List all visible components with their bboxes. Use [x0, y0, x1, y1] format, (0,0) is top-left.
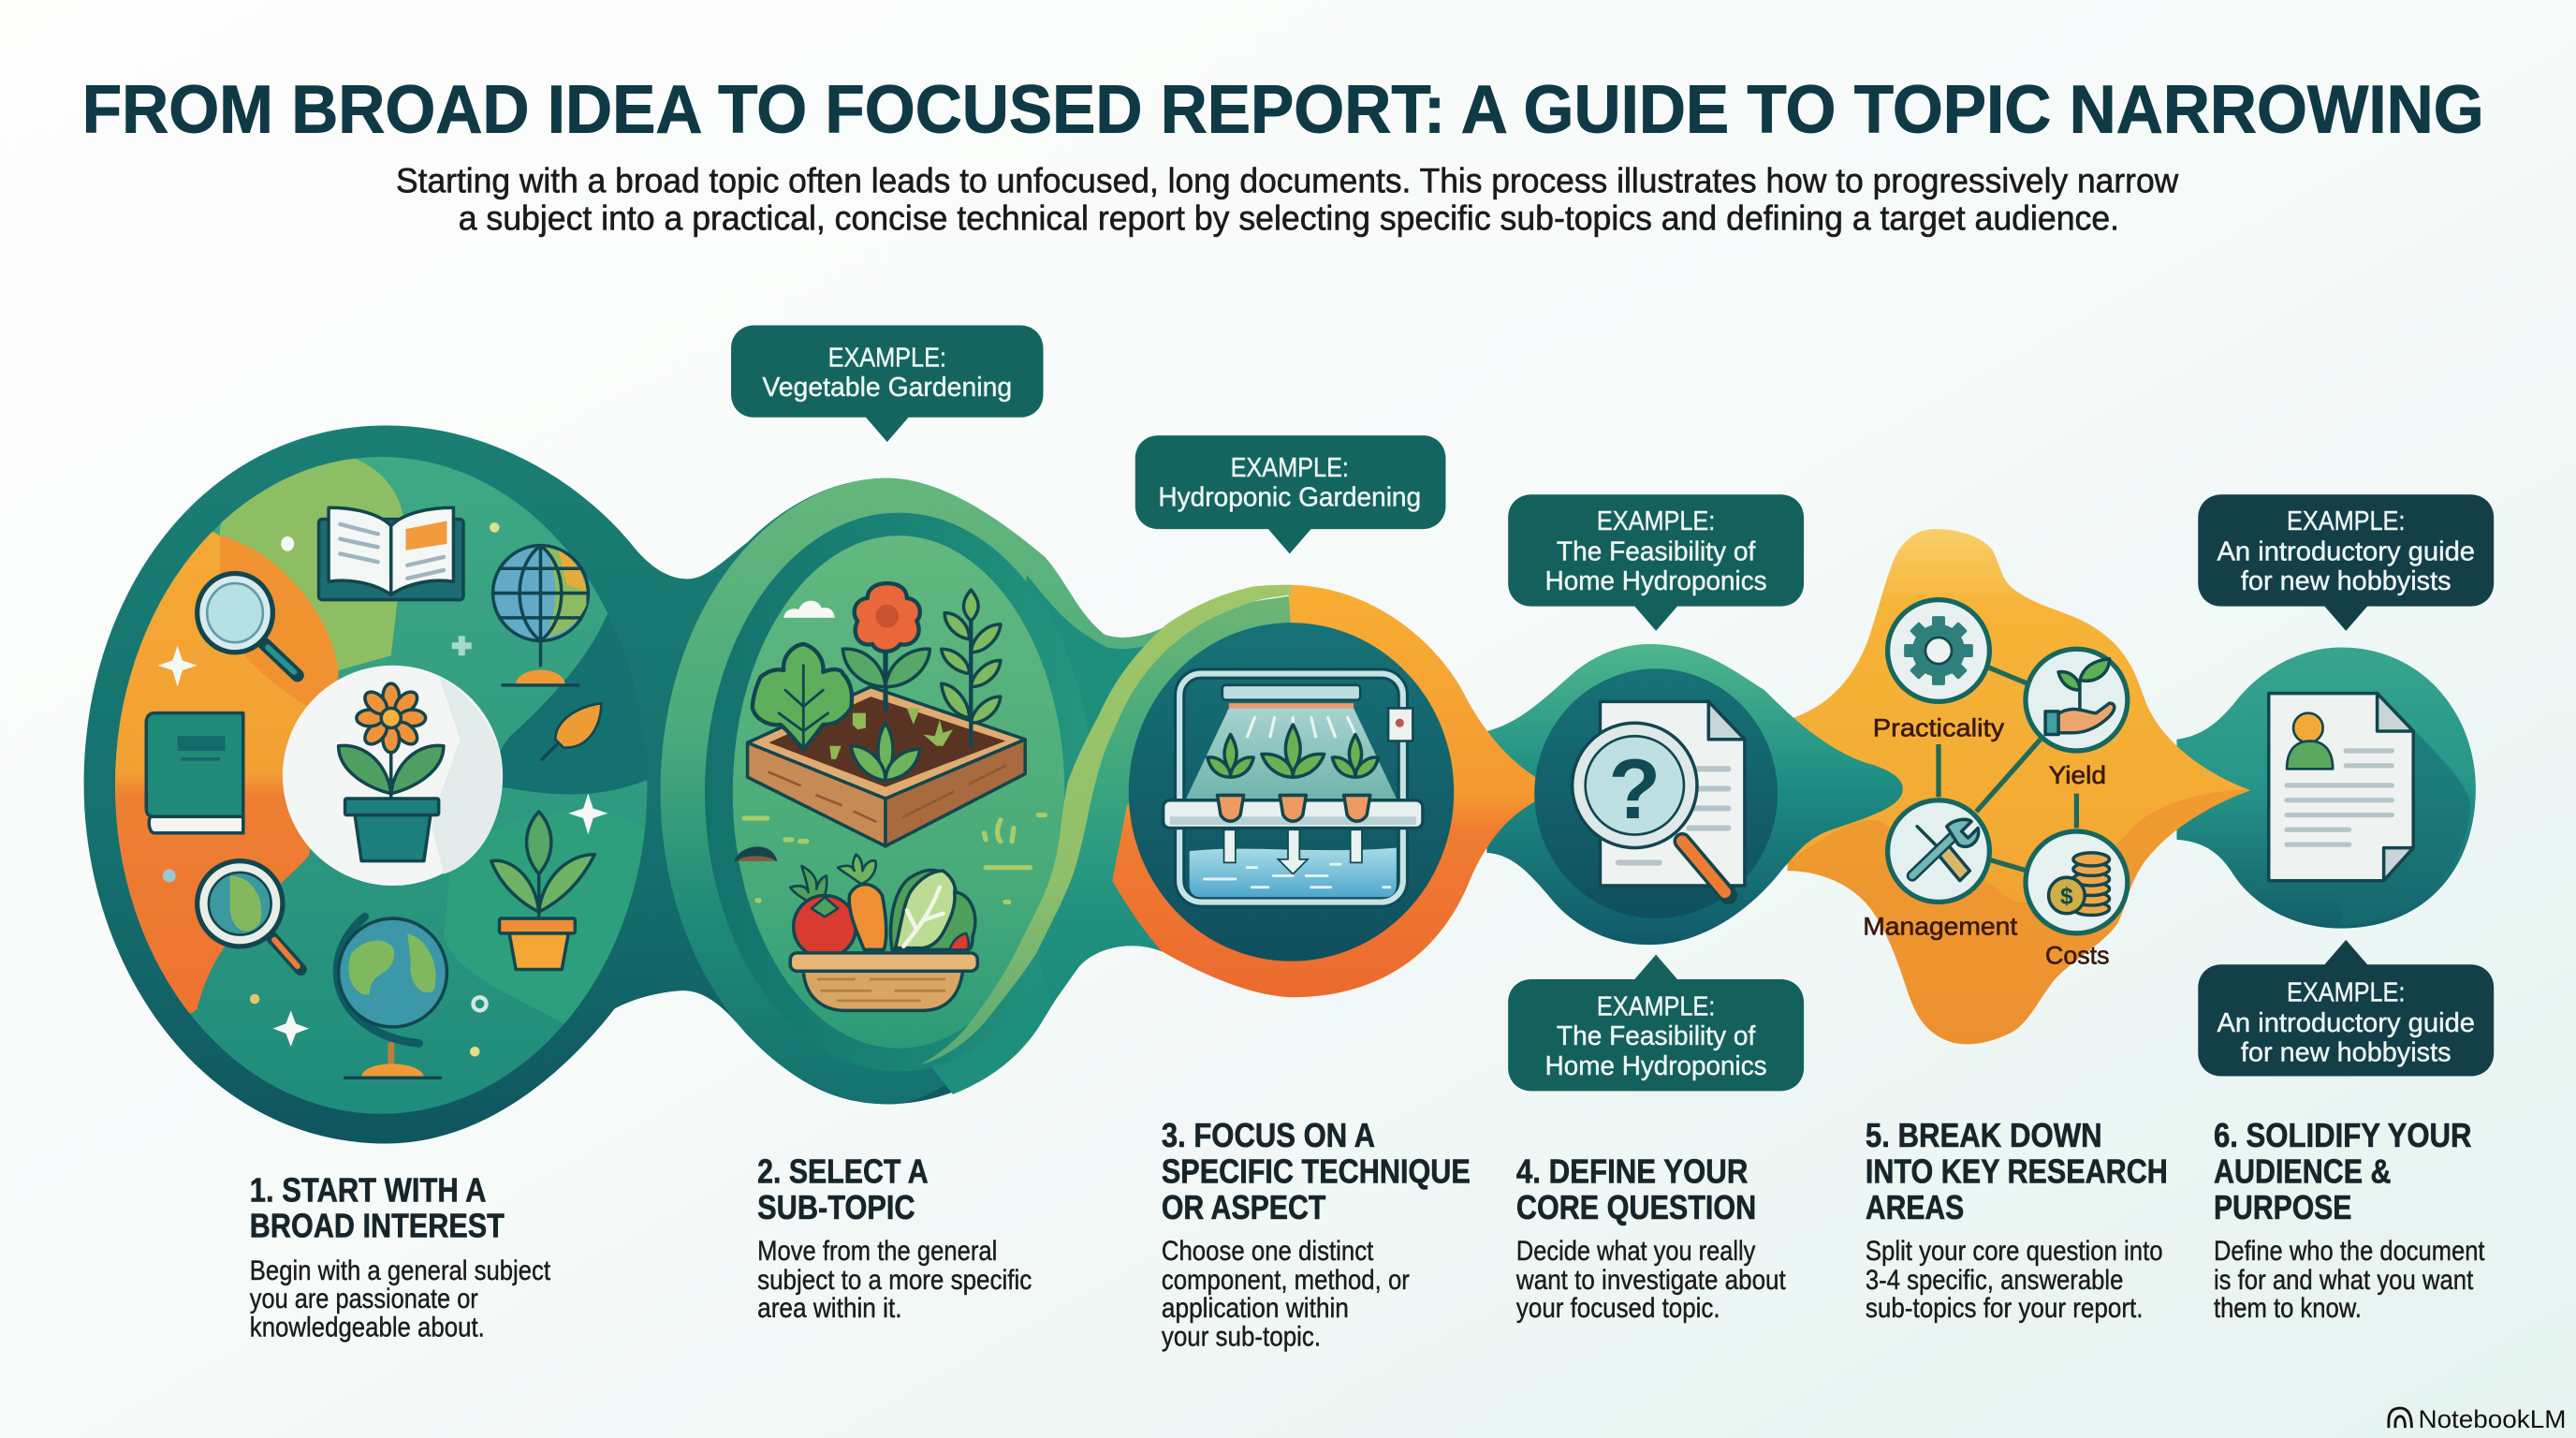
light bar: [1222, 685, 1360, 700]
step 1 text: BROAD INTEREST: [250, 1207, 505, 1245]
step 2 text: 2. SELECT A: [757, 1152, 929, 1191]
icon: leafy bush: [753, 644, 852, 749]
callout: audience top: An introductory guide: [2217, 536, 2475, 566]
icon: wire globe: [493, 546, 588, 685]
plants: [1208, 725, 1379, 777]
step 3 text: [1162, 1116, 1471, 1352]
frame: [1179, 674, 1403, 902]
step 5 text: 5. BREAK DOWN: [1866, 1116, 2102, 1154]
callout: feasibility top: EXAMPLE:: [1597, 506, 1715, 536]
screwdriver: [1917, 827, 1939, 848]
step 3 text: SPECIFIC TECHNIQUE: [1162, 1152, 1471, 1191]
step 2 text: subject to a more specific: [757, 1265, 1032, 1296]
teal-green field: [1036, 594, 1298, 1005]
ribbon outline: [84, 426, 1199, 1143]
gear hole: [1925, 638, 1952, 664]
stage 3 blob: [920, 585, 1559, 1064]
icon: raised garden bed: [748, 687, 1025, 846]
sprout: [2079, 681, 2081, 710]
icon: potted sprout: [491, 812, 594, 969]
step 3 text: Choose one distinct: [1162, 1236, 1374, 1267]
step 2 text: SUB-TOPIC: [757, 1188, 915, 1226]
watermark: NotebookLM: [2418, 1404, 2566, 1433]
step 6 text: them to know.: [2214, 1293, 2362, 1324]
step 5 text: 3-4 specific, answerable: [1866, 1265, 2123, 1296]
indicator: [1396, 719, 1404, 727]
node: hand with plant: [2026, 649, 2128, 751]
grass strokes: [744, 814, 1045, 902]
step 5 text: AREAS: [1866, 1188, 1964, 1226]
step 5 text: sub-topics for your report.: [1866, 1293, 2143, 1324]
step 4 text: [1515, 1152, 1786, 1324]
callout: feasibility bottom: EXAMPLE:: [1597, 992, 1715, 1022]
sparkles and dots: [158, 522, 607, 1056]
orange field: [114, 532, 339, 1014]
icon: fern: [942, 590, 1001, 746]
callout: audience bottom: EXAMPLE:: [2287, 978, 2405, 1008]
question mark: ?: [1608, 741, 1661, 837]
grass marks and soil: [735, 814, 1045, 902]
step 6 text: [2214, 1116, 2485, 1324]
pipe highlight: [1170, 816, 1416, 825]
step 4 text: 4. DEFINE YOUR: [1516, 1152, 1748, 1191]
callout: audience bottom: [2198, 940, 2494, 1077]
step 1 text: [250, 1170, 551, 1343]
step 1 text: you are passionate or: [250, 1284, 478, 1314]
node: gear: [1888, 600, 1989, 701]
icon: hydroponic system: [1164, 674, 1423, 902]
step 5 text: Split your core question into: [1866, 1236, 2163, 1267]
title: FROM BROAD IDEA TO FOCUSED REPORT: A GUIDE TO TOPIC NARROWING: [82, 72, 2484, 147]
step 3 text: application within: [1162, 1293, 1349, 1324]
step 4 text: CORE QUESTION: [1516, 1188, 1756, 1226]
teal base: [190, 457, 648, 1114]
callout: audience bottom: for new hobbyists: [2241, 1038, 2452, 1068]
orange outer: [1112, 585, 1559, 997]
step 6 text: Define who the document: [2214, 1236, 2485, 1267]
subtitle: [396, 161, 2179, 238]
research area labels: [1863, 712, 2110, 969]
research area labels: Practicality: [1873, 712, 2005, 741]
gear teeth: [1904, 616, 1973, 685]
icon: seedlings in soil: [829, 708, 953, 781]
stage 2 inner: [733, 536, 1064, 1049]
callout: feasibility bottom: The Feasibility of: [1557, 1021, 1756, 1051]
step 2 text: area within it.: [757, 1293, 902, 1324]
step 4 text: your focused topic.: [1516, 1293, 1720, 1324]
callout: hydroponic gardening: EXAMPLE:: [1231, 453, 1349, 483]
stage 1 inner field: [66, 457, 657, 1114]
research area labels: Management: [1863, 912, 2018, 941]
step 1 text: Begin with a general subject: [250, 1255, 551, 1286]
light green field: [220, 457, 404, 670]
ribbon: stages 1 and 2: [66, 426, 1199, 1143]
stage 5 blob: [1788, 529, 2250, 1044]
light cone: [1186, 708, 1397, 799]
icon: closed book: [146, 713, 243, 833]
water tank: [1190, 848, 1397, 897]
node: coins: [2026, 831, 2128, 933]
icon: magnifier with globe: [198, 861, 300, 969]
rays: [1247, 716, 1357, 738]
step 5 text: INTO KEY RESEARCH: [1866, 1152, 2168, 1191]
cuff: [2045, 712, 2058, 734]
lamp: [1229, 703, 1354, 708]
center white circle with flower pot: [283, 666, 503, 886]
stage 4 dark inner: [1534, 668, 1778, 918]
frame light stroke: [1179, 674, 1403, 902]
darker wedge: [500, 613, 648, 794]
callout: hydroponic gardening: [1135, 435, 1445, 553]
pipe: [1164, 800, 1423, 829]
callout: audience bottom: An introductory guide: [2217, 1008, 2475, 1038]
callout: vegetable gardening: Vegetable Gardening: [762, 373, 1012, 403]
icon: red flower: [842, 583, 929, 710]
callout: audience top: EXAMPLE:: [2287, 506, 2405, 536]
hand: [2056, 703, 2115, 733]
lower green patch: [444, 829, 645, 1024]
icon: cloud: [783, 601, 835, 618]
mound base: [738, 856, 775, 861]
dark wedge: [2341, 731, 2471, 925]
subtitle: Starting with a broad topic often leads to unfocused, long documents. This process illustrates how to progressively narrow: [396, 161, 2179, 199]
callout: feasibility bottom: Home Hydroponics: [1545, 1051, 1767, 1081]
net pots: [1218, 795, 1370, 821]
leaves: [339, 745, 444, 794]
stage 6 blob: [2176, 647, 2476, 929]
subtitle: a subject into a practical, concise technical report by selecting specific sub-topics and defining a target audience.: [459, 199, 2119, 238]
callout: feasibility top: [1508, 494, 1804, 631]
step 4 text: want to investigate about: [1515, 1265, 1786, 1296]
step 3 text: OR ASPECT: [1162, 1188, 1325, 1226]
callout: feasibility bottom: [1508, 955, 1804, 1091]
research area labels: Yield: [2049, 760, 2106, 789]
step 6 text: AUDIENCE &: [2214, 1152, 2392, 1191]
network connectors: [1939, 668, 2076, 871]
callout: hydroponic gardening: Hydroponic Gardening: [1158, 483, 1421, 513]
icon: autumn leaf: [542, 703, 601, 759]
callout: audience top: for new hobbyists: [2241, 566, 2452, 596]
green crescent band: [920, 585, 1292, 1064]
orange inner: [220, 536, 339, 723]
outer shape: [2176, 647, 2476, 929]
icon: audience document: [2269, 694, 2413, 881]
dark inner circle: [1129, 623, 1454, 961]
step 3 text: component, method, or: [1162, 1265, 1410, 1296]
step 3 text: your sub-topic.: [1162, 1321, 1321, 1352]
water ripples: [1204, 864, 1390, 888]
callout: feasibility top: Home Hydroponics: [1545, 566, 1767, 596]
step 4 text: Decide what you really: [1516, 1236, 1755, 1267]
step 5 text: [1866, 1116, 2168, 1324]
callout: feasibility top: The Feasibility of: [1557, 536, 1756, 566]
stem: [390, 740, 392, 800]
drains: [1224, 829, 1362, 874]
step 1 text: 1. START WITH A: [250, 1170, 487, 1209]
step 6 text: PURPOSE: [2214, 1188, 2351, 1226]
stage 2 outer: [661, 478, 1170, 1104]
node: tools: [1888, 800, 1989, 902]
step 2 text: [757, 1152, 1032, 1324]
control box: [1388, 708, 1412, 741]
white circle: [283, 666, 503, 886]
callout: audience top: [2198, 494, 2494, 631]
icon: earth globe on stand: [337, 917, 446, 1078]
icon: document with magnifier: [1573, 701, 1745, 895]
step 6 text: is for and what you want: [2214, 1265, 2474, 1296]
stage 4 blob: [1486, 644, 1903, 945]
stage 2 ring: [705, 513, 1092, 1071]
stage 5 lower shade: [1788, 789, 2250, 1045]
dollar: $: [2060, 884, 2073, 909]
step 3 text: 3. FOCUS ON A: [1162, 1116, 1375, 1154]
wrench: [1912, 835, 1955, 875]
pot: [345, 799, 439, 861]
icon: open book: [319, 507, 463, 600]
step 1 text: knowledgeable about.: [250, 1313, 485, 1343]
step 6 text: 6. SOLIDIFY YOUR: [2214, 1116, 2472, 1154]
shade on circle: [431, 675, 503, 874]
flower: [357, 683, 426, 753]
soil mound: [735, 846, 777, 861]
icon: magnifier upper left: [198, 574, 298, 675]
research area labels: Costs: [2045, 940, 2110, 969]
callout: vegetable gardening: EXAMPLE:: [828, 343, 946, 373]
neck between stages 2 and 3: [920, 575, 1183, 1094]
icon: vegetable basket: [790, 855, 977, 1010]
callout: vegetable gardening: [731, 325, 1044, 442]
step 2 text: Move from the general: [757, 1236, 997, 1267]
